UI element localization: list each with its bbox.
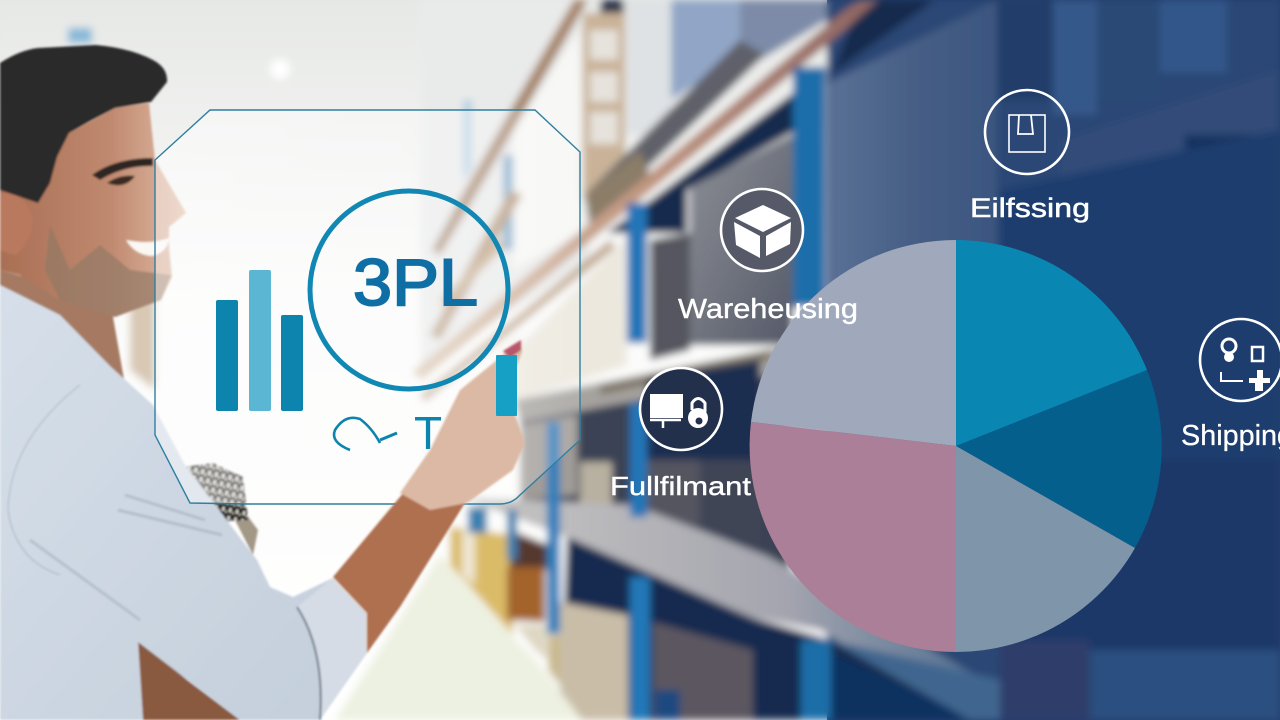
label: top service: Eilfssing (970, 193, 1090, 223)
far shelf pale (420, 0, 590, 370)
3PL circle (310, 191, 508, 389)
icon: document bag (985, 90, 1069, 174)
neck (0, 270, 125, 385)
beard shadow (45, 225, 171, 317)
small scribble icon (334, 418, 397, 450)
far lower boxes (450, 527, 513, 635)
middle shelf grey (515, 345, 790, 422)
ceiling light (270, 59, 290, 79)
thin tan beams (432, 0, 588, 255)
icon: shipping people (1200, 319, 1280, 401)
forearm and hand (333, 340, 525, 653)
under lower shelf dark (560, 537, 980, 720)
eye and brow (92, 158, 153, 180)
patterned bag (183, 463, 248, 522)
lower shelf band (460, 497, 1010, 720)
cream boxes bottom (560, 602, 628, 720)
hair (0, 45, 167, 203)
face (0, 103, 186, 317)
label: warehousing: Wareheusing (678, 293, 858, 324)
under middle shelf (520, 372, 790, 600)
ear (0, 193, 33, 255)
blurred bag tan (235, 510, 258, 555)
small letter: T (414, 407, 442, 459)
grey box top tier (690, 135, 793, 345)
dark band under main beam (607, 0, 935, 233)
label: fulfilment: Fullfilmant (610, 471, 752, 501)
slice: teal (956, 240, 1147, 446)
slice: dark blue (956, 370, 1162, 548)
man (0, 45, 367, 720)
slice: light grey (751, 240, 956, 446)
slice: pink (750, 422, 956, 652)
glass panel (155, 110, 580, 504)
shirt (0, 285, 367, 720)
pie chart (750, 240, 1162, 652)
floor (335, 555, 582, 720)
middle shelf contents (650, 233, 690, 360)
3PL circle: 3PL (353, 245, 478, 319)
lower-tier white boxes (520, 240, 627, 400)
right side base colour (827, 0, 1280, 720)
bar chart icon (216, 270, 303, 411)
bag lower left (138, 642, 240, 720)
icon: truck and lock (640, 368, 722, 450)
behind man blurred shelf (130, 290, 155, 390)
smile (126, 238, 169, 256)
selected bar (496, 355, 517, 416)
slice: grey blue (956, 446, 1135, 652)
blue uprights (793, 67, 826, 307)
cargo above main beam (585, 40, 765, 225)
main reddish beam (412, 0, 878, 380)
icon: box (721, 189, 803, 271)
